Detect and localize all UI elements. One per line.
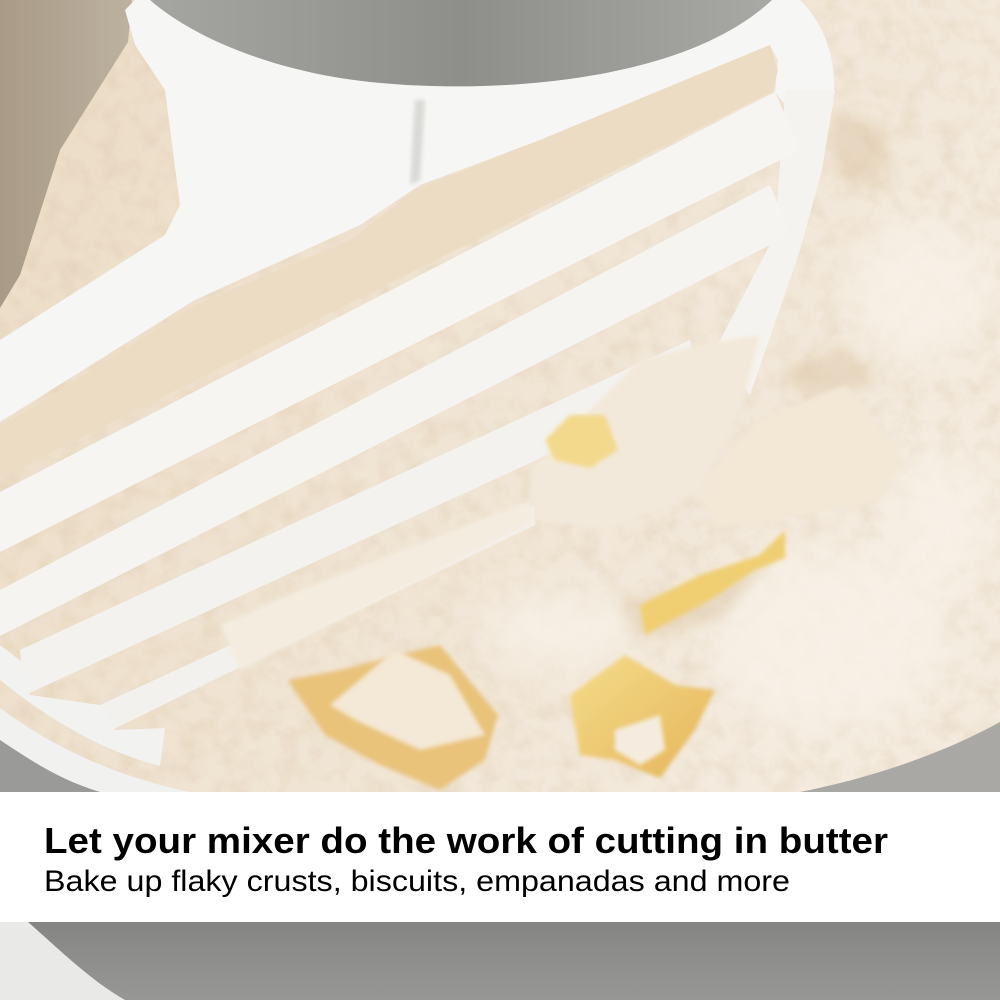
bowl rim right <box>800 722 1000 792</box>
flour highlights <box>480 220 990 730</box>
flour on tine 4 <box>220 500 535 670</box>
paddle body and top band <box>0 0 834 422</box>
photo: flour in mixer bowl <box>0 0 1000 792</box>
white caption band <box>0 792 1000 922</box>
butter: centre small <box>545 415 618 468</box>
butter: lower left <box>288 645 498 790</box>
tine 2 <box>0 185 790 636</box>
butter: lower centre <box>570 655 715 778</box>
flour mound over the paddle <box>530 335 760 530</box>
paddle lower frame <box>0 645 165 766</box>
tine 4 <box>100 505 535 730</box>
paddle stem shading <box>410 100 425 185</box>
tine 3 <box>20 340 700 695</box>
mixer shaft cylinder <box>150 0 772 86</box>
bowl rim left <box>0 708 190 792</box>
flour window behind top tine <box>0 45 778 478</box>
flour cube <box>700 385 905 525</box>
subheading: Bake up flaky crusts, biscuits, empanadas and more <box>44 865 790 898</box>
bowl inner shadow left <box>0 740 100 792</box>
right frame <box>715 90 835 395</box>
headline: Let your mixer do the work of cutting in butter <box>44 820 888 861</box>
bowl wall: brushed steel top left <box>0 0 132 308</box>
tine 1 <box>0 92 800 552</box>
butter: long right <box>640 530 785 635</box>
flour shadows <box>620 110 890 640</box>
bowl base strip <box>0 922 1000 1000</box>
mixer paddle <box>0 0 835 766</box>
butter chunks <box>288 385 905 790</box>
